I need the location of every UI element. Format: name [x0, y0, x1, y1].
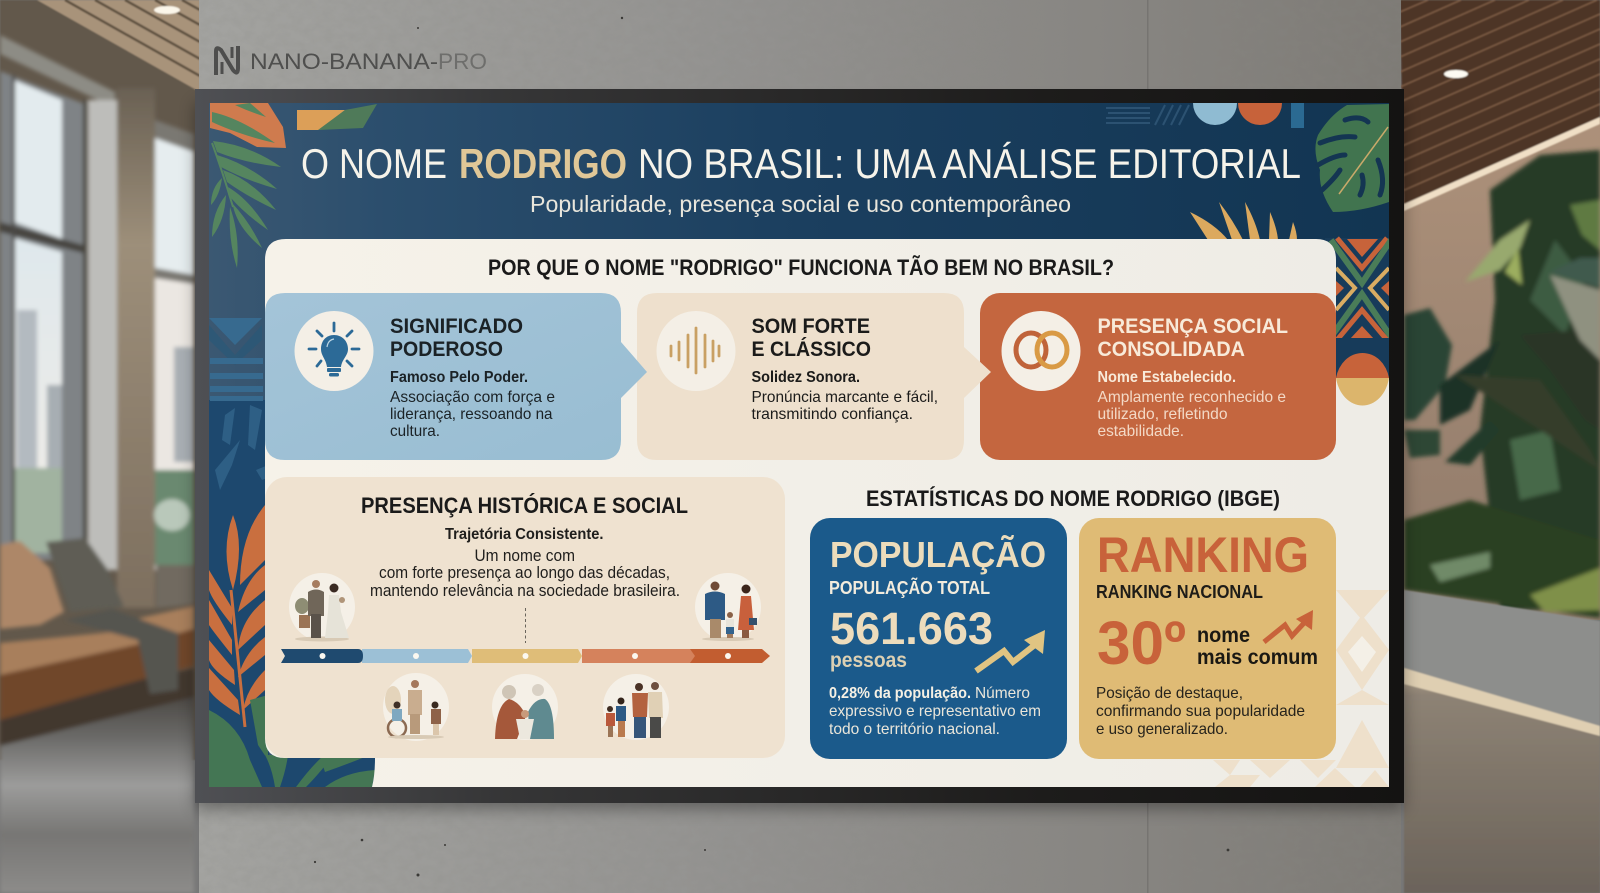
ranking number: 30º: [1097, 609, 1186, 677]
icon: interlocked rings: [1002, 311, 1080, 391]
decoration: bottom-left green leaves: [209, 695, 375, 787]
card text: SIGNIFICADO: [390, 315, 523, 338]
icon: rising arrow: [1264, 610, 1313, 642]
card text: liderança, ressoando na: [390, 406, 553, 423]
card text: SOM FORTE: [752, 315, 870, 338]
display frame: [195, 89, 1404, 809]
card: população: POPULAÇÃO TOTAL: [829, 577, 990, 598]
card text: Pronúncia marcante e fácil,: [752, 389, 938, 406]
card: população: 0,28% da população.: [829, 685, 971, 702]
decoration: gold palm: [1190, 202, 1297, 240]
card text: [390, 315, 555, 440]
decoration: beige pattern bottom right: [1213, 590, 1389, 787]
card text: Amplamente reconhecido e: [1098, 389, 1286, 406]
card: população: Número: [975, 685, 1030, 702]
cream main panel: [265, 239, 1389, 787]
illustration: community with wheelchair: [383, 673, 449, 741]
card: ranking: e uso generalizado.: [1096, 721, 1228, 738]
icon: light bulb: [294, 311, 374, 391]
history text block: [370, 526, 680, 600]
title: RODRIGO: [459, 140, 627, 187]
watermark: NANO-BANANA-PRO: [216, 46, 487, 75]
card: população: todo o território nacional.: [829, 721, 1000, 738]
card text: E CLÁSSICO: [752, 338, 871, 361]
card: ranking: nome: [1197, 623, 1250, 647]
history text block: mantendo relevância na sociedade brasileira.: [370, 582, 680, 600]
card: som forte e clássico: [637, 293, 991, 460]
screen background: [209, 103, 1389, 787]
card text: CONSOLIDADA: [1098, 338, 1245, 361]
title: O NOME: [301, 140, 447, 187]
watermark: NANO-BANANA-PRO: NANO-BANANA-: [250, 49, 438, 74]
illustration: elderly couple with baby: [492, 674, 558, 740]
card text: Famoso Pelo Poder.: [390, 369, 528, 386]
card: significado poderoso: [265, 293, 647, 460]
background: concrete column: [199, 0, 1401, 893]
heading: estatísticas: ESTATÍSTICAS DO NOME RODRIGO (IBGE): [866, 486, 1280, 511]
card: população: [810, 518, 1067, 759]
decoration: top-right stripes and circles: [1106, 103, 1304, 128]
history text block: com forte presença ao longo das décadas,: [379, 564, 670, 582]
screen: infographic: [209, 103, 1391, 787]
panel: presença histórica e social: [265, 477, 785, 758]
card: população: POPULAÇÃO: [830, 533, 1046, 575]
card: ranking: RANKING: [1097, 527, 1309, 583]
card: ranking: mais comum: [1197, 645, 1318, 669]
card: ranking: Posição de destaque,: [1096, 685, 1243, 702]
card: presença social consolidada: [980, 293, 1336, 460]
card text: utilizado, refletindo: [1098, 406, 1228, 423]
decoration: left geometric pattern and dark field: [209, 318, 269, 787]
card: ranking: confirmando sua popularidade: [1096, 703, 1305, 720]
illustration: wedding couple: [289, 573, 355, 642]
card text: transmitindo confiança.: [752, 406, 913, 423]
decoration: top-left shapes and palm: [210, 103, 377, 268]
decoration: monstera leaf: [1315, 104, 1389, 212]
icon: sound wave: [656, 311, 736, 391]
background: right room with slatted ceiling and plants: [1400, 0, 1600, 893]
card text: PRESENÇA SOCIAL: [1098, 315, 1288, 338]
watermark: NANO-BANANA-PRO: PRO: [438, 49, 487, 74]
illustration: family group: [603, 674, 669, 740]
card text: estabilidade.: [1098, 423, 1184, 440]
card: ranking: [1079, 518, 1336, 759]
title: NO BRASIL: UMA ANÁLISE EDITORIAL: [638, 140, 1301, 187]
background: left room with windows and bench: [0, 0, 200, 893]
card text: Associação com força e: [390, 389, 555, 406]
card: população: expressivo e representativo em: [829, 703, 1041, 720]
card text: Nome Estabelecido.: [1098, 369, 1236, 386]
decoration: orange fronds: [209, 505, 265, 727]
title: [302, 142, 1300, 178]
illustration: family with child: [695, 573, 761, 641]
card: ranking: RANKING NACIONAL: [1096, 581, 1263, 602]
population number: 561.663: [830, 603, 993, 654]
card: população: pessoas: [830, 649, 907, 672]
subtitle: Popularidade, presença social e uso contemporâneo: [530, 191, 1071, 217]
decoration: right tribal pattern: [1328, 236, 1389, 338]
heading: why the name works: POR QUE O NOME "RODRIGO" FUNCIONA TÃO BEM NO BRASIL?: [488, 255, 1114, 280]
decoration: half circles: [1336, 353, 1389, 405]
card text: Solidez Sonora.: [752, 369, 860, 386]
icon: rising arrow: [976, 630, 1045, 671]
history text block: Trajetória Consistente.: [445, 526, 604, 543]
card text: [752, 315, 938, 423]
history heading: PRESENÇA HISTÓRICA E SOCIAL: [361, 493, 688, 518]
card text: cultura.: [390, 423, 440, 440]
history text block: Um nome com: [474, 547, 575, 565]
card text: PODEROSO: [390, 338, 503, 361]
timeline bar: [281, 608, 770, 663]
card text: [1098, 315, 1288, 440]
